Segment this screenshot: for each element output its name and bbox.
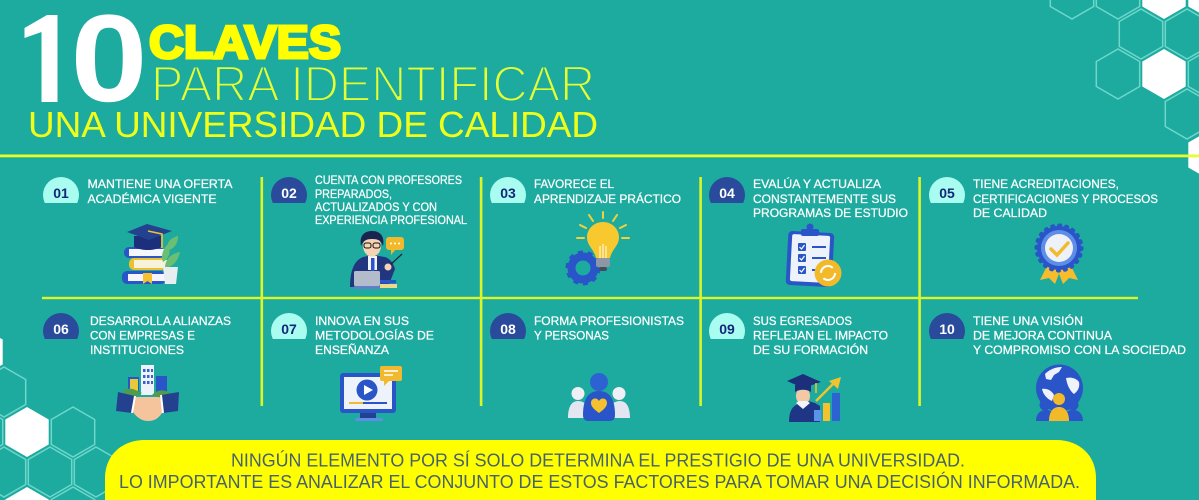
text 09: SUS EGRESADOS — [753, 314, 852, 328]
icon: monitor with video — [340, 366, 402, 421]
badge 02: 02 — [281, 185, 297, 201]
text 10: Y COMPROMISO CON LA SOCIEDAD — [973, 343, 1186, 357]
text 02 — [315, 173, 467, 227]
icon: handshake and buildings — [116, 365, 179, 421]
text 05 — [973, 177, 1158, 220]
text 06 — [90, 314, 231, 357]
icon: quality medal — [1036, 226, 1082, 284]
badge 07: 07 — [281, 321, 297, 337]
title digit 1 — [24, 15, 58, 102]
title — [24, 14, 596, 138]
panel 04 — [709, 176, 908, 287]
panel 08 — [490, 313, 684, 421]
header divider — [0, 154, 1199, 157]
grid lines — [42, 177, 1138, 406]
text 03: APRENDIZAJE PRÁCTICO — [534, 191, 681, 206]
text 01 — [88, 177, 233, 206]
icon: people with heart — [568, 373, 630, 421]
text 05: DE CALIDAD — [973, 206, 1047, 220]
text 07 — [315, 314, 434, 357]
text 01: MANTIENE UNA OFERTA — [88, 177, 233, 191]
text 01: ACADÉMICA VIGENTE — [88, 191, 216, 206]
panel 07 — [271, 313, 434, 421]
text 08: Y PERSONAS — [534, 328, 609, 342]
hexagon pattern: top right — [1050, 0, 1199, 180]
badge 10: 10 — [939, 321, 955, 337]
badge 10 — [929, 313, 965, 339]
title word CLAVES: CLAVES — [149, 16, 341, 68]
panel 03 — [490, 177, 681, 284]
panel 01 — [43, 177, 233, 284]
callout line 2: LO IMPORTANTE ES ANALIZAR EL CONJUNTO DE ESTOS FACTORES PARA TOMAR UNA DECISIÓN INFORMADA. — [119, 471, 1080, 492]
text 03 — [534, 177, 681, 206]
text 07: ENSEÑANZA — [315, 343, 390, 357]
hexagon pattern: bottom left — [0, 327, 118, 500]
callout line 1: NINGÚN ELEMENTO POR SÍ SOLO DETERMINA EL PRESTIGIO DE UNA UNIVERSIDAD. — [231, 450, 965, 470]
text 06: CON EMPRESAS E — [90, 328, 195, 342]
badge 09: 09 — [719, 321, 735, 337]
badge 05: 05 — [939, 185, 955, 201]
icon: books with graduation cap and plant — [122, 224, 180, 284]
icon: teacher with laptop — [350, 231, 404, 289]
title line UNA UNIVERSIDAD DE CALIDAD: UNA UNIVERSIDAD DE CALIDAD — [28, 104, 598, 145]
badge 04 — [709, 177, 745, 203]
panel 10 — [929, 313, 1186, 421]
badge 01: 01 — [53, 185, 69, 201]
text 07: INNOVA EN SUS — [315, 314, 409, 328]
badge 08: 08 — [500, 321, 516, 337]
title line PARA IDENTIFICAR: PARA IDENTIFICAR — [151, 56, 595, 112]
badge 03 — [490, 177, 526, 203]
text 02: ACTUALIZADOS Y CON — [315, 200, 437, 214]
text 02: CUENTA CON PROFESORES — [315, 173, 462, 187]
badge 05 — [929, 177, 965, 203]
text 08: FORMA PROFESIONISTAS — [534, 314, 684, 328]
text 09 — [753, 314, 888, 357]
text 10 — [973, 313, 1186, 357]
panel 02 — [271, 173, 467, 289]
panel 06 — [43, 313, 231, 421]
badge 03: 03 — [500, 185, 516, 201]
text 04: CONSTANTEMENTE SUS — [753, 192, 896, 206]
icon: globe with people — [1036, 364, 1083, 421]
text 04 — [753, 176, 908, 220]
badge 08 — [490, 313, 526, 339]
text 08 — [534, 314, 684, 342]
badge 01 — [43, 177, 79, 203]
text 07: METODOLOGÍAS DE — [315, 328, 434, 342]
badge 04: 04 — [719, 185, 735, 201]
badge 06: 06 — [53, 321, 69, 337]
badge 06 — [43, 313, 79, 339]
text 06: DESARROLLA ALIANZAS — [90, 314, 231, 328]
text 06: INSTITUCIONES — [90, 343, 184, 357]
text 10: TIENE UNA VISIÓN — [973, 313, 1083, 328]
text 05: CERTIFICACIONES Y PROCESOS — [973, 192, 1158, 206]
badge 07 — [271, 313, 307, 339]
panel 05 — [929, 177, 1158, 284]
text 05: TIENE ACREDITACIONES, — [973, 177, 1119, 191]
text 09: DE SU FORMACIÓN — [753, 342, 868, 357]
text 09: REFLEJAN EL IMPACTO — [753, 328, 888, 342]
badge 02 — [271, 177, 307, 203]
icon: light bulb with gear — [568, 212, 629, 284]
icon: clipboard checklist — [786, 224, 842, 287]
text 04: PROGRAMAS DE ESTUDIO — [753, 206, 908, 220]
text 02: PREPARADOS, — [315, 187, 392, 201]
text 02: EXPERIENCIA PROFESIONAL — [315, 213, 467, 227]
panel 09 — [709, 313, 888, 422]
text 03: FAVORECE EL — [534, 177, 614, 191]
text 10: DE MEJORA CONTINUA — [973, 328, 1113, 342]
text 04: EVALÚA Y ACTUALIZA — [753, 176, 882, 191]
icon: graduate with growth chart — [787, 374, 841, 422]
callout — [105, 440, 1096, 500]
badge 09 — [709, 313, 745, 339]
